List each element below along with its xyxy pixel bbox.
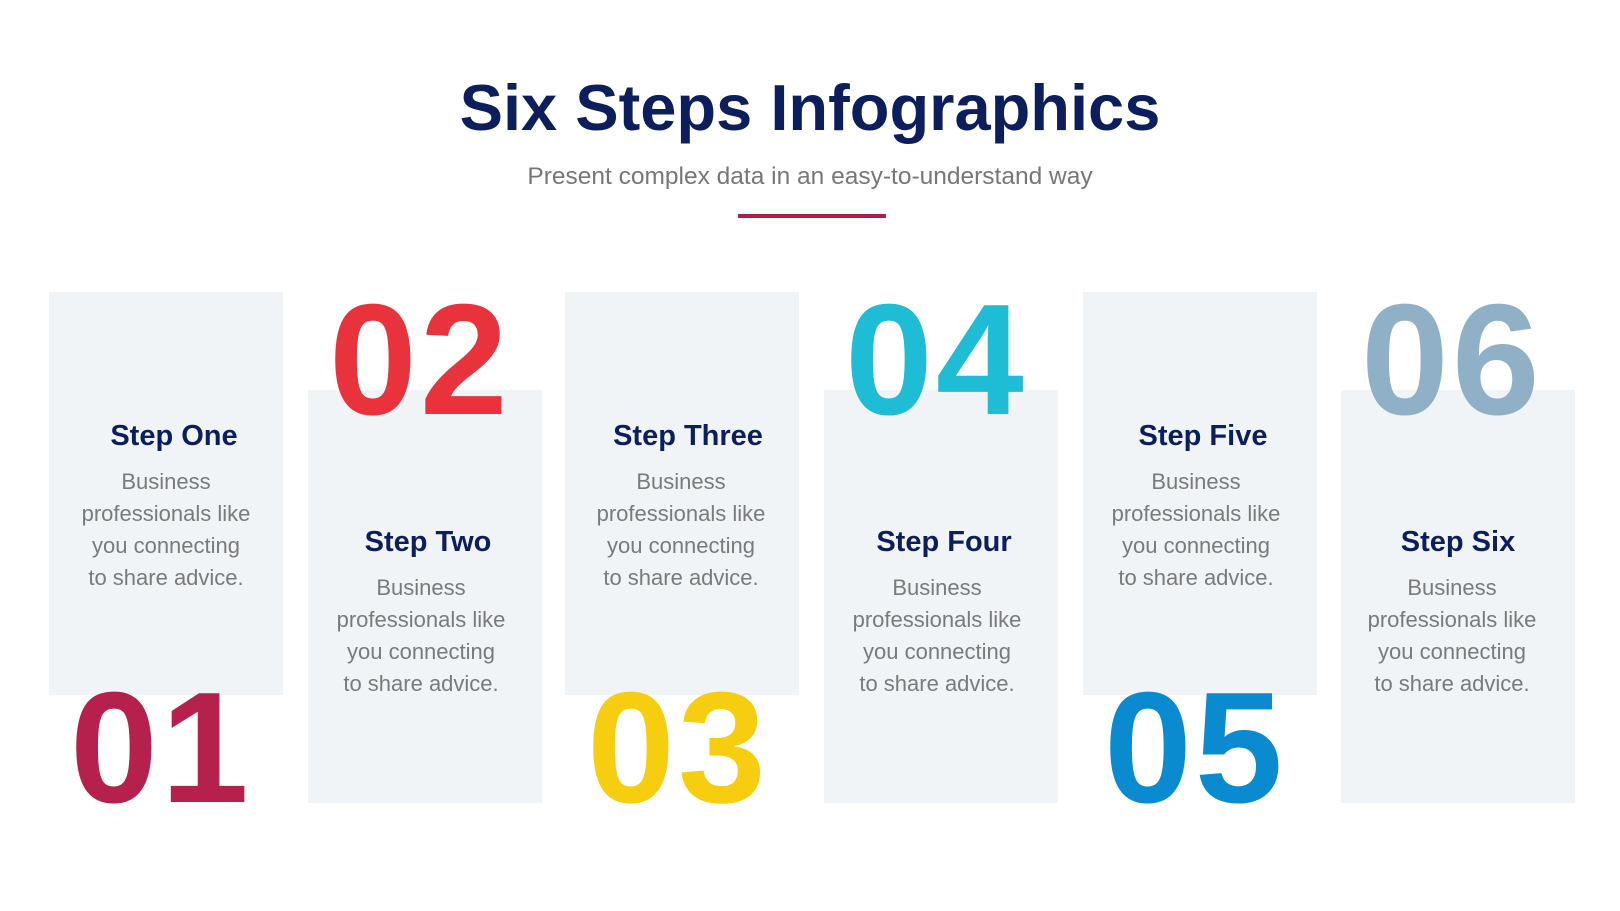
text: step five: professionals like — [1112, 501, 1280, 526]
text: step four — [853, 575, 1021, 696]
text: step three: Business — [636, 469, 726, 494]
heading: step four: Step Four — [876, 526, 1012, 558]
number 02: 02 — [329, 272, 511, 448]
panel: step five — [1083, 292, 1317, 695]
text: step six — [1368, 575, 1536, 696]
text: step two: to share advice. — [343, 671, 499, 696]
subtitle: Present complex data in an easy-to-understand way — [527, 163, 1093, 190]
panel: step two — [308, 390, 542, 803]
panel: step six — [1341, 390, 1575, 803]
text: step six: Business — [1407, 575, 1497, 600]
text: step three: professionals like — [597, 501, 765, 526]
text: step five — [1112, 469, 1280, 590]
heading: step five: Step Five — [1139, 420, 1267, 452]
title: Six Steps Infographics — [460, 71, 1160, 144]
heading: step six: Step Six — [1401, 526, 1515, 558]
heading: step three: Step Three — [613, 420, 763, 452]
heading: step two: Step Two — [365, 526, 491, 558]
text: step two — [337, 575, 505, 696]
panel: step four — [824, 390, 1058, 803]
number 05: 05 — [1104, 660, 1286, 836]
accent line — [738, 214, 886, 218]
number 03: 03 — [587, 660, 769, 836]
text: step five: you connecting — [1122, 533, 1270, 558]
text: step four: you connecting — [863, 639, 1011, 664]
text: step three: you connecting — [607, 533, 755, 558]
panel: step one — [49, 292, 283, 695]
text: step five: Business — [1151, 469, 1241, 494]
panel: step three — [565, 292, 799, 695]
text: step one: Business — [121, 469, 211, 494]
text: step two: you connecting — [347, 639, 495, 664]
text: step five: to share advice. — [1118, 565, 1274, 590]
text: step one: professionals like — [82, 501, 250, 526]
text: step one: to share advice. — [88, 565, 244, 590]
text: step four: to share advice. — [859, 671, 1015, 696]
text: step one — [82, 469, 250, 590]
text: step six: professionals like — [1368, 607, 1536, 632]
text: step three — [597, 469, 765, 590]
text: step two: Business — [376, 575, 466, 600]
number 06: 06 — [1361, 272, 1543, 448]
text: step three: to share advice. — [603, 565, 759, 590]
text: step six: to share advice. — [1374, 671, 1530, 696]
heading: step one: Step One — [110, 420, 238, 452]
text: step six: you connecting — [1378, 639, 1526, 664]
text: step four: Business — [892, 575, 982, 600]
text: step one: you connecting — [92, 533, 240, 558]
number 01: 01 — [70, 660, 252, 836]
number 04: 04 — [845, 272, 1027, 448]
text: step two: professionals like — [337, 607, 505, 632]
text: step four: professionals like — [853, 607, 1021, 632]
